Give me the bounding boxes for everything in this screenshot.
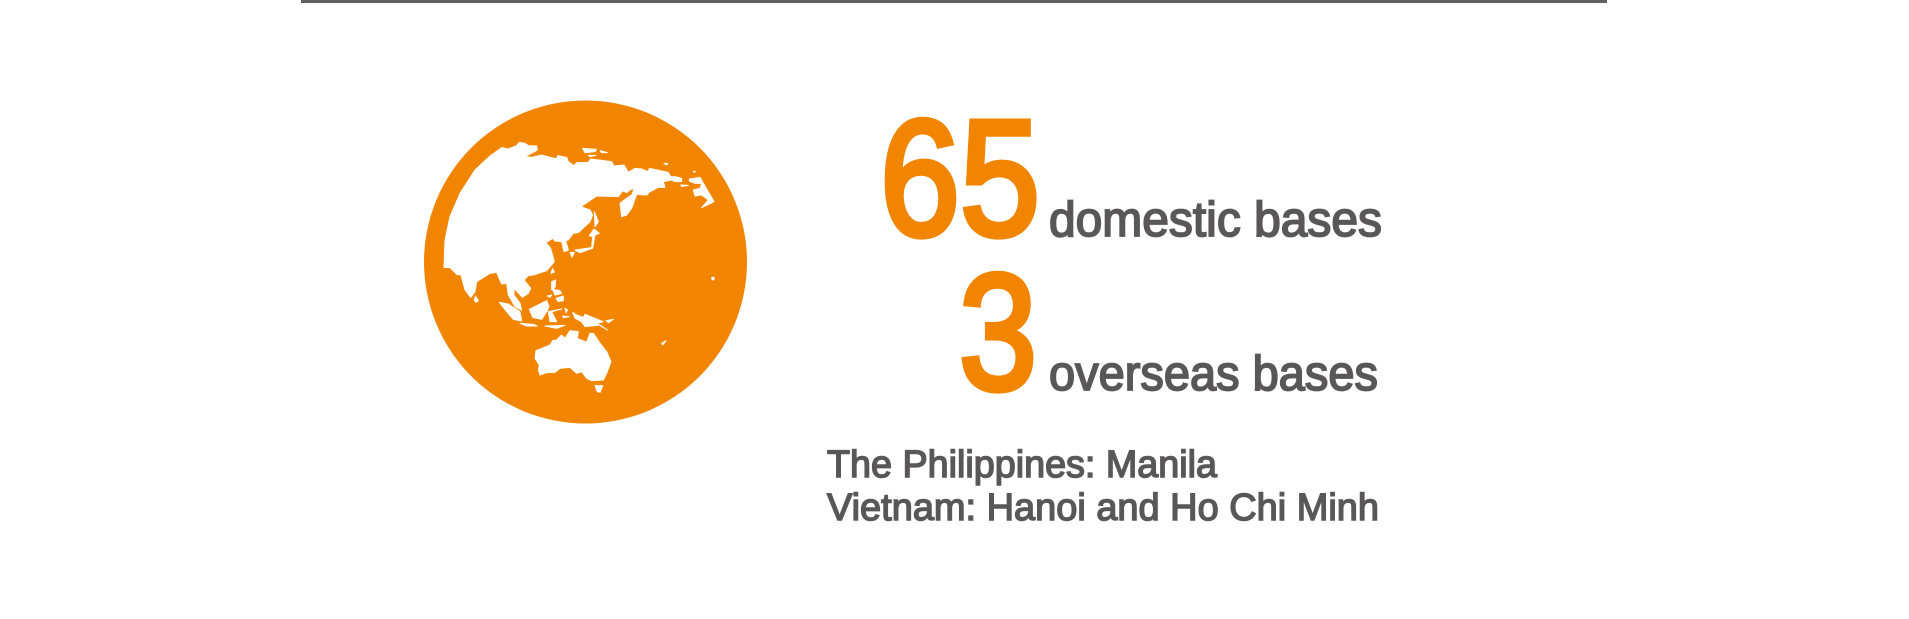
location: Vietnam: Vietnam: Hanoi and Ho Chi Minh	[827, 487, 1379, 529]
number: 3: 3	[959, 240, 1037, 424]
label: overseas bases: overseas bases	[1049, 347, 1378, 401]
stat: 65 domestic bases	[880, 86, 1382, 270]
stat: 3 overseas bases	[959, 240, 1378, 424]
number: 65: 65	[880, 86, 1040, 270]
map: Southeast Asian and Pacific islands	[474, 280, 613, 330]
map: Japan, Sakhalin, Taiwan and small islands	[551, 148, 714, 345]
location: The Philippines: The Philippines: Manila	[827, 444, 1218, 486]
label: domestic bases: domestic bases	[1049, 193, 1382, 247]
text block: overseas locations	[827, 444, 1379, 529]
map: Asia	[444, 142, 682, 310]
icon: orange globe with white map of Asia-Pacific	[424, 100, 747, 424]
map: Chukotka	[689, 177, 714, 208]
map: Australia and Tasmania	[535, 331, 611, 392]
